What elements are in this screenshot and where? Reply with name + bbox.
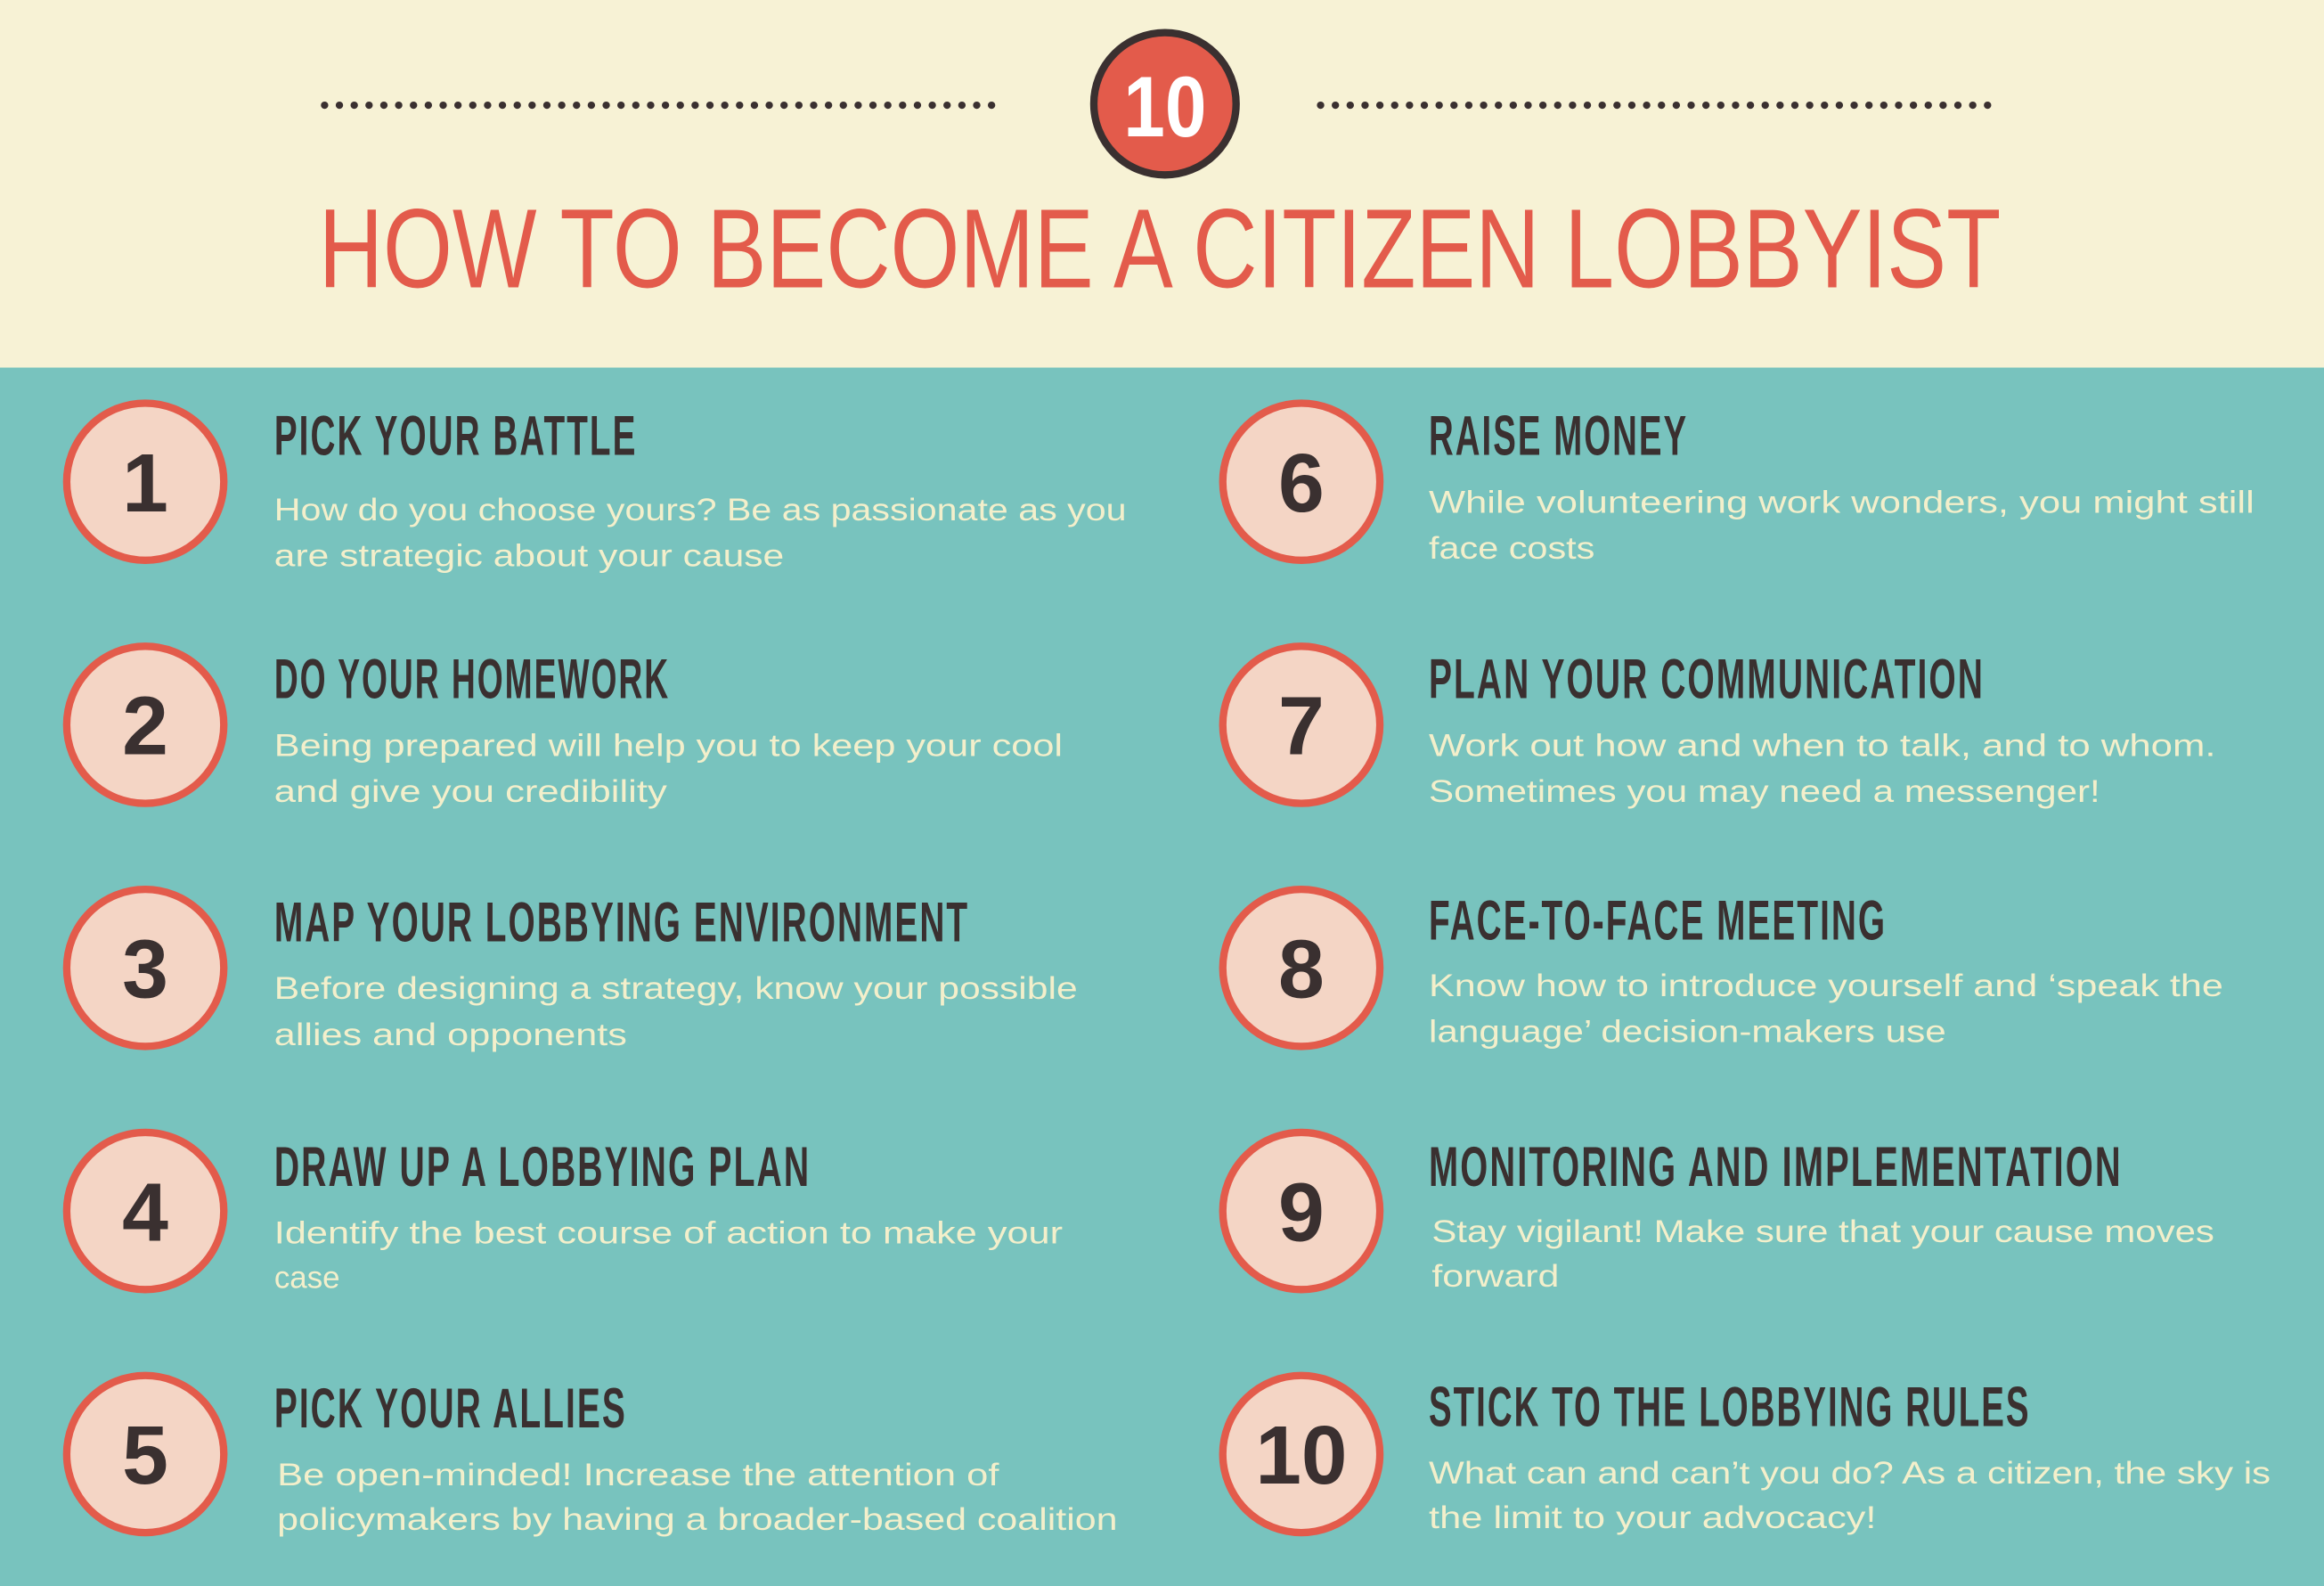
step 4: DRAW UP A LOBBYING PLAN [274,1136,811,1198]
step 1: PICK YOUR BATTLE [274,405,637,468]
step 9: forward [1431,1259,1559,1294]
step 5: Be open-minded! Increase the attention of [277,1458,999,1492]
step 8 [1223,889,2223,1049]
step 1 [67,403,1127,573]
step 1: are strategic about your cause [274,538,784,573]
step 6: While volunteering work wonders, you might still [1429,486,2255,520]
step 10 [1223,1376,2271,1535]
step 6: RAISE MONEY [1429,405,1688,468]
step 6 [1223,403,2255,566]
step 2 [67,646,1063,809]
step 3 [67,889,1078,1052]
step 5: policymakers by having a broader-based coalition [277,1502,1118,1537]
step 4 [67,1132,1063,1296]
step 4: 4 [122,1165,168,1258]
step 5 [67,1376,1118,1537]
step 7 [1223,646,2216,809]
step 7: PLAN YOUR COMMUNICATION [1429,649,1985,711]
step 1: 1 [122,437,168,529]
step 2: Being prepared will help you to keep your cool [274,728,1063,763]
step 10: What can and can’t you do? As a citizen, the sky is [1429,1456,2271,1491]
step 6: face costs [1429,531,1594,566]
badge: 10 [1094,33,1236,175]
step 7: Sometimes you may need a messenger! [1429,774,2100,809]
step 10: the limit to your advocacy! [1429,1500,1877,1535]
step 8: language’ decision-makers use [1429,1014,1946,1049]
step 4: Identify the best course of action to make your [274,1216,1063,1251]
step 6: 6 [1278,437,1325,529]
step 2: and give you credibility [274,774,667,809]
step 9 [1223,1132,2214,1294]
step 7: 7 [1278,680,1325,773]
step 3: allies and opponents [274,1018,627,1052]
step 2: 2 [122,680,168,773]
badge: 10: 10 [1123,60,1206,155]
step 8: FACE-TO-FACE MEETING [1429,890,1887,952]
step 3: Before designing a strategy, know your possible [274,971,1078,1006]
step 8: 8 [1278,923,1325,1016]
step 4: case [274,1261,340,1296]
step 3: 3 [122,923,168,1016]
step 9: Stay vigilant! Make sure that your cause moves [1431,1214,2214,1249]
step 10: 10 [1255,1409,1347,1501]
step 2: DO YOUR HOMEWORK [274,649,670,711]
step 8: Know how to introduce yourself and ‘speak the [1429,969,2223,1003]
step 5: PICK YOUR ALLIES [274,1378,627,1440]
step 5: 5 [122,1409,168,1501]
step 3: MAP YOUR LOBBYING ENVIRONMENT [274,891,969,953]
step 1: How do you choose yours? Be as passionate as you [274,493,1127,527]
step 7: Work out how and when to talk, and to whom. [1429,728,2216,763]
step 9: 9 [1278,1165,1325,1258]
